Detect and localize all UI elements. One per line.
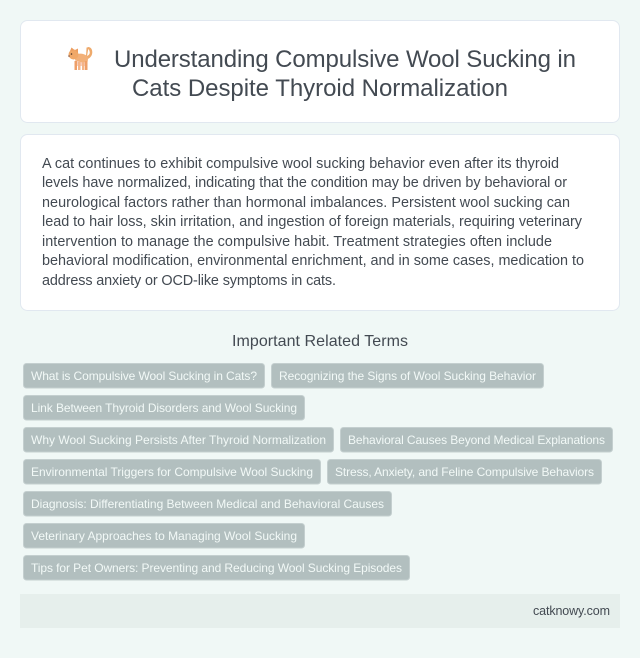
footer: catknowy.com (533, 604, 610, 618)
title (114, 46, 576, 102)
tag (340, 428, 612, 452)
tag list (24, 364, 612, 580)
tag: Why Wool Sucking Persists After Thyroid Normalization (31, 433, 326, 447)
heading: related terms: Important Related Terms (232, 333, 408, 350)
description text: intervention to manage the compulsive habit. Treatment strategies often include (42, 234, 552, 250)
description text: lead to hair loss, skin irritation, and ingestion of foreign materials, requiring veterinary (42, 214, 583, 230)
icon: cat (68, 48, 92, 70)
tag: What is Compulsive Wool Sucking in Cats? (31, 369, 257, 383)
tag: Tips for Pet Owners: Preventing and Reducing Wool Sucking Episodes (31, 561, 402, 575)
tag (24, 524, 304, 548)
tag (24, 556, 410, 580)
description text: address anxiety or OCD-like symptoms in cats. (42, 273, 336, 289)
description text (42, 156, 584, 289)
tag (24, 492, 392, 516)
panel: title header (20, 20, 620, 122)
description text: A cat continues to exhibit compulsive wool sucking behavior even after its thyroid (42, 156, 559, 172)
tag (24, 396, 304, 420)
tag: Environmental Triggers for Compulsive Wool Sucking (31, 465, 313, 479)
tag: Stress, Anxiety, and Feline Compulsive Behaviors (335, 465, 594, 479)
panel: description (20, 134, 620, 310)
tag (24, 364, 264, 388)
description text: neurological factors rather than hormonal imbalances. Persistent wool sucking can (42, 195, 570, 211)
tag: Veterinary Approaches to Managing Wool Sucking (31, 529, 297, 543)
title: Understanding Compulsive Wool Sucking in (114, 46, 576, 73)
description text: levels have normalized, indicating that the condition may be driven by behavioral or (42, 175, 567, 191)
title: Cats Despite Thyroid Normalization (132, 75, 508, 102)
tag: Link Between Thyroid Disorders and Wool Sucking (31, 401, 297, 415)
description text: behavioral modification, environmental enrichment, and in some cases, medication to (42, 253, 584, 269)
tag (24, 428, 334, 452)
tag (24, 460, 320, 484)
tag (328, 460, 602, 484)
footer (20, 594, 620, 628)
tag: Recognizing the Signs of Wool Sucking Behavior (279, 369, 536, 383)
tag (272, 364, 544, 388)
tag: Behavioral Causes Beyond Medical Explanations (348, 433, 605, 447)
tag: Diagnosis: Differentiating Between Medical and Behavioral Causes (31, 497, 384, 511)
